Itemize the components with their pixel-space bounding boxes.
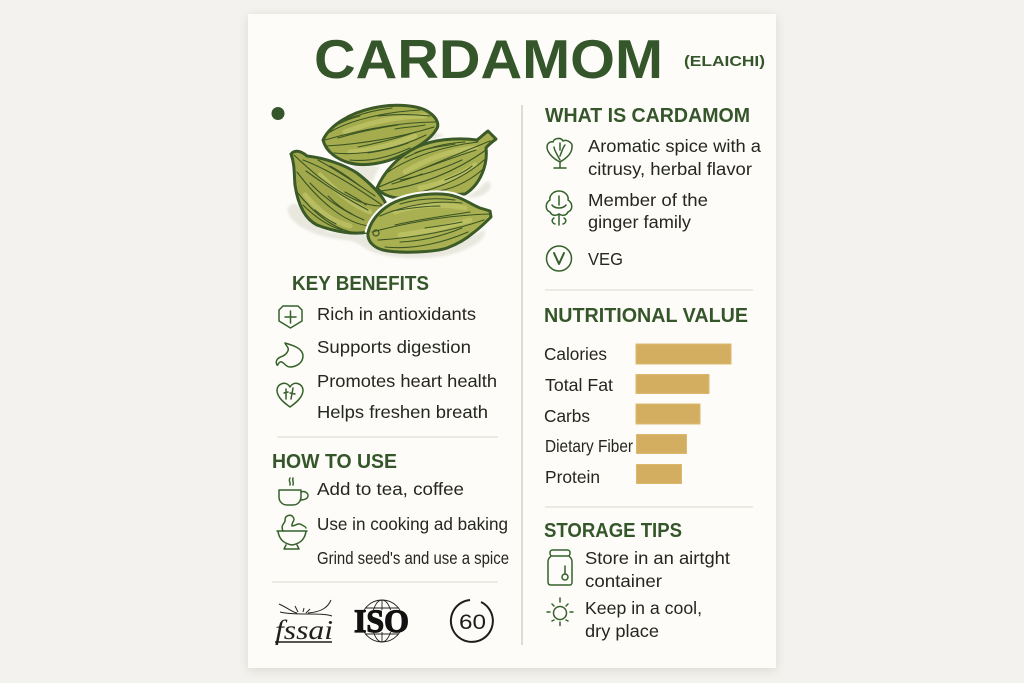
logo: fssai bbox=[275, 600, 333, 645]
icon: heart with leaves bbox=[277, 383, 303, 407]
pod: right bbox=[377, 131, 496, 198]
icon: mortar and herbs bbox=[277, 515, 307, 549]
icon: cup bbox=[279, 478, 308, 505]
icon: plant bbox=[547, 138, 572, 168]
text: ginger family: ginger family bbox=[588, 212, 691, 232]
row: calories bbox=[544, 344, 731, 364]
heading: how to use: HOW TO USE bbox=[272, 451, 397, 473]
text: airtight: Store in an airtght bbox=[585, 548, 730, 568]
text: fresh breath: Helps freshen breath bbox=[317, 402, 488, 422]
row: total fat: Total Fat bbox=[545, 375, 613, 395]
icon: stomach bbox=[276, 343, 303, 367]
text: tea coffee: Add to tea, coffee bbox=[317, 479, 464, 499]
heading: what is cardamom: WHAT IS CARDAMOM bbox=[545, 105, 750, 127]
text: antioxidants: Rich in antioxidants bbox=[317, 304, 476, 324]
text: container: container bbox=[585, 571, 662, 591]
text: grind: Grind seed's and use a spice bbox=[317, 548, 509, 568]
row: dietary fiber bbox=[545, 434, 686, 456]
infographic canvas bbox=[246, 13, 778, 673]
text: cooking: Use in cooking ad baking bbox=[317, 514, 508, 534]
icon: shield bbox=[279, 306, 302, 328]
pod shadows bbox=[288, 133, 491, 258]
text: digestion: Supports digestion bbox=[317, 337, 471, 357]
icon: veg mark bbox=[546, 246, 572, 271]
pod: left bbox=[291, 151, 386, 233]
bullet dot bbox=[272, 107, 284, 120]
text: citrusy: citrusy, herbal flavor bbox=[588, 159, 752, 179]
bar chart bbox=[544, 344, 731, 487]
row: total fat bbox=[545, 374, 709, 395]
text: dry place: dry place bbox=[585, 621, 659, 641]
pod: top bbox=[323, 105, 438, 165]
logo: fssai: fssai bbox=[275, 615, 333, 645]
subtitle: (ELAICHI) bbox=[684, 53, 765, 70]
row: dietary fiber: Dietary Fiber bbox=[545, 436, 633, 456]
heading: key benefits: KEY BENEFITS bbox=[292, 273, 429, 295]
panel: how to use bbox=[272, 451, 509, 568]
row: protein: Protein bbox=[545, 467, 600, 487]
text: heart health: Promotes heart health bbox=[317, 371, 497, 391]
logo: 60: 60 bbox=[459, 611, 486, 634]
panel: storage tips bbox=[544, 520, 730, 641]
panel: nutritional value bbox=[544, 305, 748, 487]
logo: ISO: ISO bbox=[354, 604, 409, 640]
row: calories: Calories bbox=[544, 344, 607, 364]
text: cool: Keep in a cool, bbox=[585, 598, 702, 618]
title: CARDAMOM bbox=[314, 28, 663, 90]
card shadow bbox=[248, 16, 776, 670]
icon: sun bbox=[547, 598, 573, 626]
icon: ginger tree bbox=[546, 191, 572, 225]
row: protein bbox=[545, 464, 682, 487]
pod: front bbox=[368, 194, 491, 252]
panel: key benefits bbox=[276, 273, 497, 422]
heading: storage tips: STORAGE TIPS bbox=[544, 520, 682, 542]
heading: nutritional value: NUTRITIONAL VALUE bbox=[544, 305, 748, 327]
center vertical divider bbox=[521, 105, 523, 645]
text: veg: VEG bbox=[588, 249, 623, 269]
logo: 60 bbox=[451, 600, 493, 642]
certification logos bbox=[275, 600, 493, 645]
text: aromatic spice: Aromatic spice with a bbox=[588, 136, 761, 156]
icon: jar bbox=[548, 550, 572, 585]
illustration: cardamom pods bbox=[288, 105, 496, 258]
row: carbs: Carbs bbox=[544, 406, 590, 426]
panel: what is cardamom bbox=[545, 105, 761, 271]
row: carbs bbox=[544, 404, 700, 426]
card panel bbox=[248, 14, 776, 668]
text: member: Member of the bbox=[588, 190, 708, 210]
